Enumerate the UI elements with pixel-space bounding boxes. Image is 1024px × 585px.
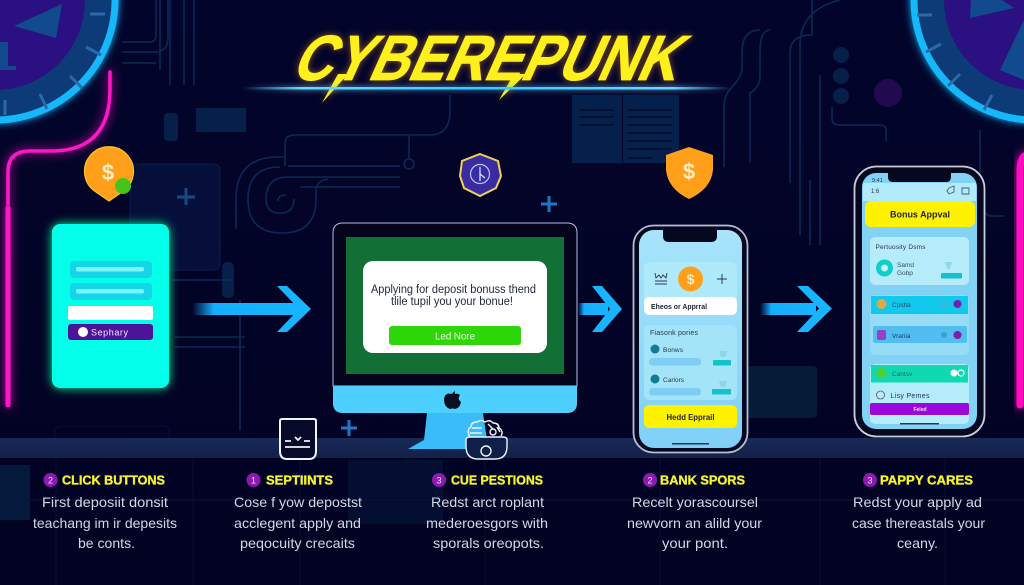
row label: Eheos or Apprral bbox=[651, 302, 707, 311]
line 3: ceany. bbox=[897, 535, 938, 551]
lower list row: Lisy Pemes bbox=[890, 393, 930, 400]
monitor body bbox=[333, 223, 577, 386]
icon: dollar pin bbox=[84, 147, 134, 201]
plus decorations bbox=[177, 188, 557, 436]
yellow header label: Bonus Appval bbox=[890, 210, 950, 220]
wheel left bbox=[0, 0, 115, 120]
green row bbox=[871, 365, 968, 382]
line 2: mederoesgors with bbox=[426, 515, 548, 531]
icon: dollar pin: $ bbox=[102, 160, 114, 185]
phone 1: $ bbox=[687, 271, 695, 287]
profile card bbox=[870, 237, 969, 285]
dialog line 1: Applying for deposit bonuss thend bbox=[371, 284, 536, 296]
line 2: case thereastals your bbox=[852, 515, 985, 531]
number badge bbox=[44, 473, 58, 487]
profile glyph bbox=[945, 262, 952, 269]
lower card bbox=[870, 364, 969, 424]
white row bbox=[644, 297, 737, 315]
profile text: Gobp bbox=[897, 270, 913, 277]
heading: SEPTIINTS bbox=[266, 474, 333, 488]
number badge: 3 bbox=[436, 476, 442, 486]
apple logo bbox=[444, 391, 461, 409]
neon pink line left bbox=[8, 72, 110, 405]
column 1 text bbox=[33, 473, 177, 551]
profile title: Pertuosity Dsms bbox=[876, 244, 926, 251]
list row 2 bbox=[649, 374, 731, 396]
list row 1 bbox=[649, 344, 731, 366]
band: horizontal floor strip bbox=[0, 438, 1024, 458]
line 2: teachang im ir depesits bbox=[33, 515, 177, 531]
line 2: acclegent apply and bbox=[234, 515, 361, 531]
column 2 text bbox=[234, 473, 362, 551]
column 4 text bbox=[627, 473, 762, 551]
phone 1 bbox=[634, 226, 748, 452]
profile text: Samd bbox=[897, 262, 914, 269]
icon: hexagon badge bbox=[460, 154, 501, 196]
column 3 text bbox=[426, 473, 548, 551]
icon: dollar shield bbox=[666, 147, 713, 199]
heading: CUE PESTIONS bbox=[451, 474, 543, 488]
monitor stand bbox=[408, 413, 502, 449]
home bar bbox=[900, 423, 939, 424]
purple button bbox=[870, 403, 969, 415]
home bar bbox=[672, 443, 709, 444]
cyan row: Cpidta bbox=[892, 302, 911, 309]
number badge: 2 bbox=[48, 476, 53, 486]
status text: 9:41 bbox=[872, 178, 883, 184]
icon: calendar bbox=[280, 419, 316, 459]
yellow header bbox=[865, 201, 975, 227]
dialog bbox=[363, 261, 547, 353]
line 1: First deposiit donsit bbox=[42, 494, 168, 510]
list row 2: Carlors bbox=[663, 377, 685, 384]
step 1 card: Sephary bbox=[91, 328, 128, 338]
background panels bbox=[0, 47, 902, 524]
dialog line 2: tlile tupil you your bonue! bbox=[391, 296, 513, 308]
number badge: 3 bbox=[867, 476, 873, 486]
coin bbox=[678, 266, 703, 292]
green row: Cantsv bbox=[892, 371, 913, 378]
line 2: newvorn an alild your bbox=[627, 515, 762, 531]
top card bbox=[644, 262, 737, 315]
header row bbox=[863, 183, 976, 201]
lower list row bbox=[876, 391, 930, 400]
number badge: 2 bbox=[647, 476, 653, 486]
middle list card bbox=[870, 295, 969, 355]
line 1: Recelt yorascoursel bbox=[632, 494, 758, 510]
button label: Led Nore bbox=[435, 332, 475, 342]
arrow 3 bbox=[760, 286, 832, 332]
profile bar bbox=[941, 273, 962, 278]
arrow 2 bbox=[578, 286, 622, 332]
heading: CLICK BUTTONS bbox=[62, 474, 165, 488]
menu icon bbox=[655, 273, 667, 284]
monitor chin bbox=[333, 386, 577, 413]
title: CYBEREPUNK bbox=[284, 23, 699, 94]
column 5 text bbox=[852, 473, 985, 551]
yellow button bbox=[644, 405, 737, 428]
dialog button bbox=[389, 326, 521, 345]
profile ring bbox=[878, 262, 890, 274]
wheel right bbox=[914, 0, 1024, 120]
list row 1: Bonws bbox=[663, 347, 684, 354]
screen bbox=[346, 237, 564, 374]
line 3: sporals oreopots. bbox=[433, 535, 544, 551]
list card bbox=[644, 325, 737, 400]
icon: dollar shield: $ bbox=[683, 159, 695, 184]
heading: BANK SPORS bbox=[660, 474, 745, 488]
number badge: 1 bbox=[251, 476, 256, 486]
monitor bbox=[333, 223, 577, 449]
yellow button label: Hedd Epprail bbox=[666, 412, 714, 422]
arrow 1 bbox=[192, 286, 311, 332]
line 1: Redst your apply ad bbox=[853, 494, 982, 510]
title underline bbox=[243, 87, 731, 90]
neon pink line right bbox=[1020, 155, 1024, 405]
blue row bbox=[873, 326, 967, 343]
cyan row bbox=[871, 296, 968, 314]
step 1 card bbox=[52, 224, 169, 388]
header icons bbox=[947, 186, 969, 194]
heading: PAPPY CARES bbox=[880, 474, 973, 488]
icon: bowl bbox=[466, 420, 507, 459]
plus bbox=[717, 274, 727, 284]
phone 2 bbox=[854, 166, 984, 436]
purple button label: Feled bbox=[913, 407, 927, 413]
blue row: Vrariia bbox=[892, 333, 911, 340]
time label: 1:6 bbox=[871, 189, 880, 195]
line 3: your pont. bbox=[662, 535, 728, 551]
line 1: Cose f yow depostst bbox=[234, 494, 362, 510]
list heading: Fiasonk pories bbox=[650, 330, 698, 337]
line 1: Redst arct roplant bbox=[431, 494, 544, 510]
line 3: be conts. bbox=[78, 535, 135, 551]
line 3: peqocuity crecaits bbox=[240, 535, 355, 551]
